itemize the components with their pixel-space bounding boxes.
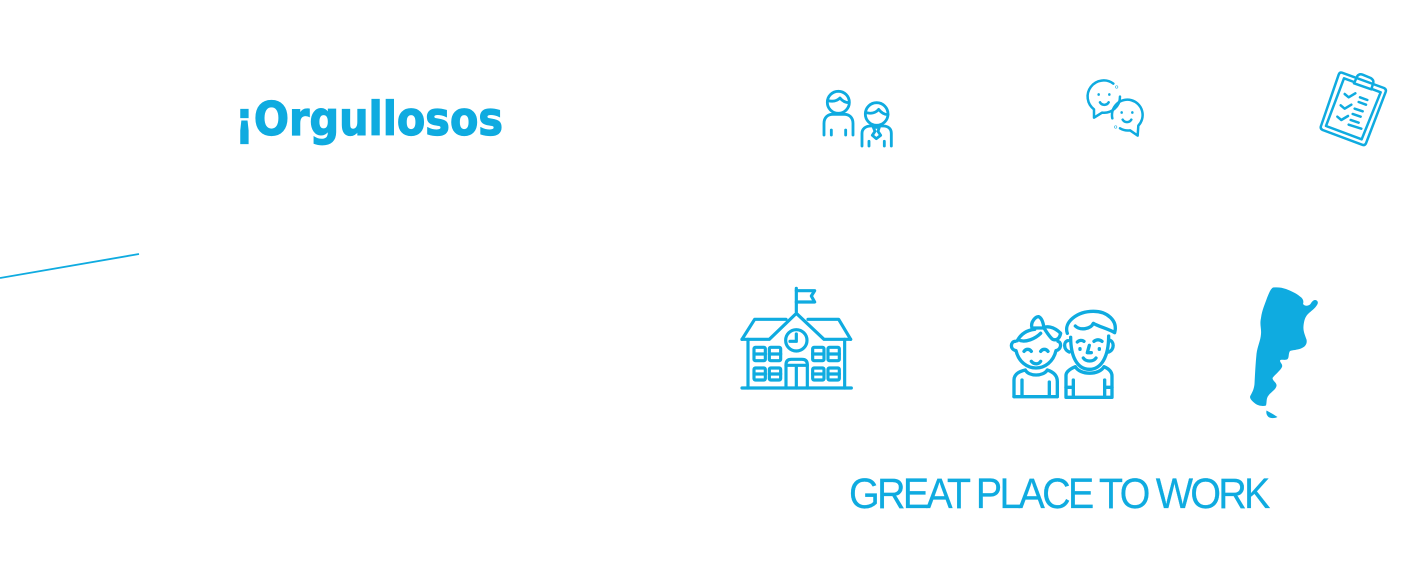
icon: map of Argentina — [1250, 287, 1318, 418]
diagonal line — [0, 254, 139, 278]
icon: school building — [742, 288, 851, 388]
heading: Great Place to Work: GREAT PLACE TO WORK — [849, 469, 1271, 517]
island — [1266, 410, 1278, 418]
icon: chat bubbles with smiles — [1088, 80, 1143, 136]
icon: two employees — [824, 91, 891, 146]
icon: clipboard checklist — [1321, 73, 1386, 145]
icon: two children — [1011, 311, 1115, 397]
heading: Orgullosos: ¡Orgullosos — [235, 92, 503, 146]
